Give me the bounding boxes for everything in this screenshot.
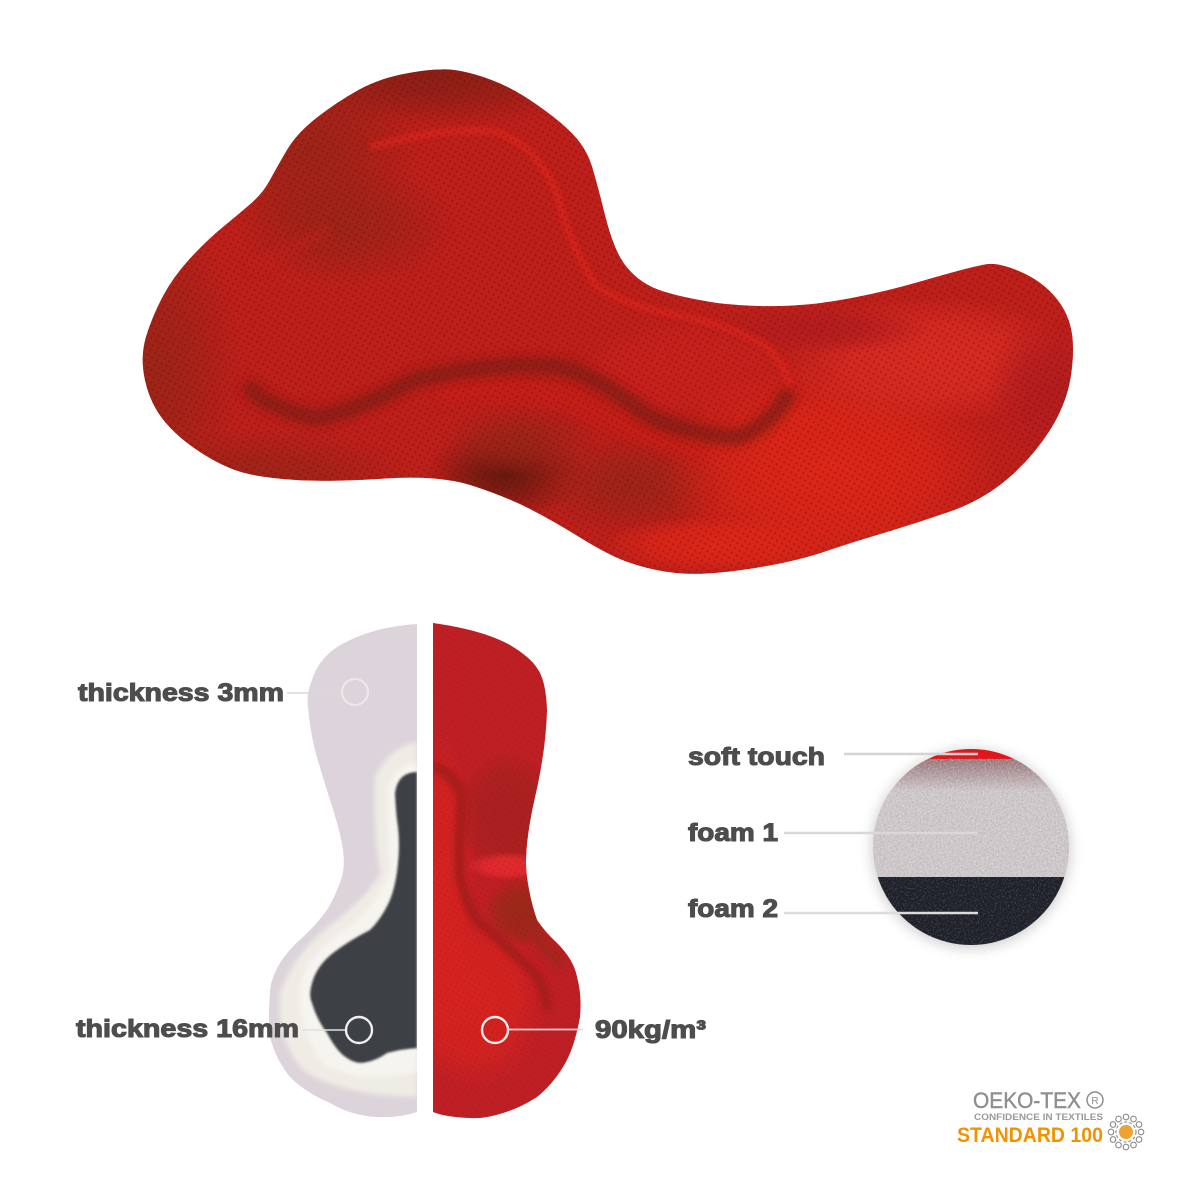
callout: thickness 3mm bbox=[78, 679, 368, 707]
OEKO-TEX Standard 100 logo bbox=[957, 1088, 1144, 1150]
small pad, left half: underside with foam bbox=[262, 620, 418, 1120]
callout: 90kg/m3 density: 90kg/m³ bbox=[595, 1016, 706, 1044]
callout: 90kg/m3 density bbox=[482, 1016, 706, 1044]
white foam ring bbox=[279, 742, 417, 1097]
cross-section disc of foam layers bbox=[870, 745, 1075, 952]
callout: thickness 16mm bbox=[76, 1015, 372, 1043]
dark foam core bbox=[310, 772, 417, 1063]
main pad: red saddle chamois, three-quarter view bbox=[142, 69, 1073, 574]
raised centre zone bbox=[247, 131, 790, 455]
callout: thickness 16mm: thickness 16mm bbox=[76, 1015, 299, 1043]
OEKO-TEX Standard 100 logo: CONFIDENCE IN TEXTILES bbox=[974, 1112, 1103, 1122]
callout: soft touch: soft touch bbox=[688, 743, 825, 771]
OEKO-TEX Standard 100 logo: OEKO-TEX bbox=[973, 1088, 1081, 1113]
callout: thickness 3mm: thickness 3mm bbox=[78, 679, 284, 707]
callout: foam 2: foam 2 bbox=[688, 895, 778, 923]
OEKO-TEX Standard 100 logo: STANDARD 100 bbox=[957, 1124, 1103, 1147]
icon: flower emblem bbox=[1108, 1114, 1144, 1150]
OEKO-TEX Standard 100 logo: R bbox=[1091, 1096, 1099, 1107]
small pad, right half: red top surface bbox=[433, 623, 581, 1118]
callout: foam 1: foam 1 bbox=[688, 819, 778, 847]
